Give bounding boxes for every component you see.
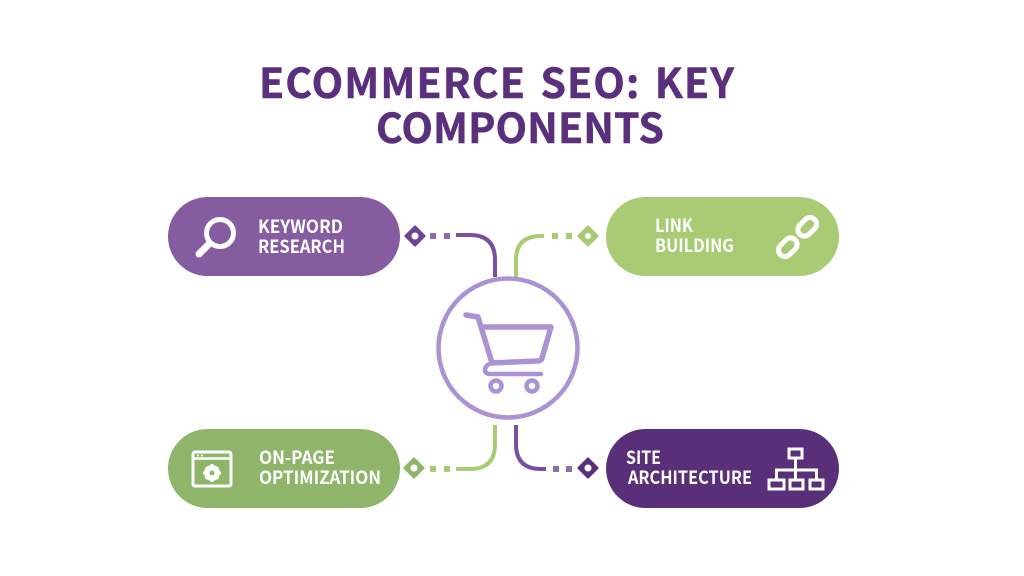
icon: magnifying glass xyxy=(199,220,234,254)
icon: site hierarchy xyxy=(769,449,823,489)
panel: site architecture xyxy=(606,429,839,508)
icon: chain link xyxy=(776,215,819,259)
title xyxy=(259,50,735,155)
connector: on-page optimization xyxy=(405,425,495,477)
text: site architecture xyxy=(626,444,752,490)
text: on-page optimization: OPTIMIZATION xyxy=(259,464,381,490)
text: link building xyxy=(655,212,734,258)
text: link building: BUILDING xyxy=(655,232,734,258)
text: keyword research: RESEARCH xyxy=(258,233,345,259)
icon: shopping cart xyxy=(466,315,551,392)
text: on-page optimization xyxy=(259,444,381,490)
title: COMPONENTS xyxy=(376,95,664,155)
panel: keyword research xyxy=(168,197,400,276)
panel: on-page optimization xyxy=(168,429,400,508)
icon: browser window with gear xyxy=(193,452,231,486)
connector: keyword research xyxy=(406,227,495,277)
connector: site architecture xyxy=(516,425,597,477)
panel: link building xyxy=(606,197,839,276)
text: site architecture: ARCHITECTURE xyxy=(627,464,752,490)
text: keyword research: KEYWORD xyxy=(258,213,343,239)
text: site architecture: SITE xyxy=(626,444,661,470)
text: link building: LINK xyxy=(655,212,694,238)
text: on-page optimization: ON-PAGE xyxy=(259,444,335,470)
text: keyword research xyxy=(258,213,345,259)
connector: link building xyxy=(516,227,597,277)
center circle with shopping cart xyxy=(438,278,578,418)
title: ECOMMERCE SEO: KEY xyxy=(259,50,735,110)
